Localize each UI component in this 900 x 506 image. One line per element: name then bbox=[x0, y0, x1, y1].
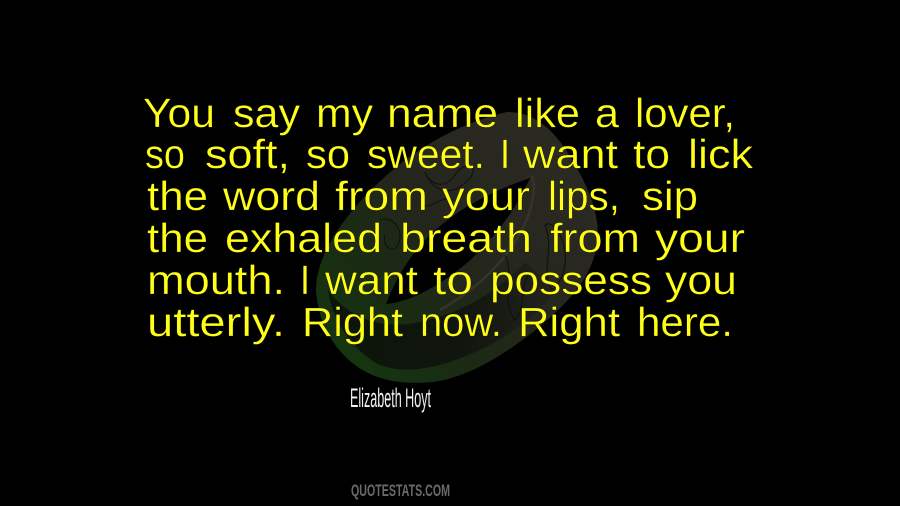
quote line 5: want bbox=[324, 257, 419, 303]
quote line 3: the bbox=[147, 173, 208, 219]
quote line 4: your bbox=[655, 215, 745, 261]
quote line 1: name bbox=[387, 90, 498, 136]
quote line 5: you bbox=[665, 257, 737, 303]
ring outer body bbox=[316, 112, 598, 383]
quote line 2: soft, bbox=[205, 131, 290, 177]
text: Elizabeth Hoyt bbox=[350, 383, 431, 413]
quote line 5 bbox=[147, 257, 737, 303]
quote line 3: sip bbox=[642, 173, 698, 219]
quote line 2: to bbox=[633, 131, 670, 177]
quote line 4: exhaled bbox=[225, 215, 382, 261]
quote line 3 bbox=[147, 173, 698, 219]
quote line 2: so bbox=[306, 131, 350, 177]
quote line 6: now. bbox=[420, 299, 502, 345]
quote line 4: breath bbox=[400, 215, 532, 261]
quote line 1: a bbox=[595, 90, 619, 136]
quote line 4 bbox=[147, 215, 745, 261]
quote line 5: mouth. bbox=[147, 257, 285, 303]
quote line 1: say bbox=[233, 90, 301, 136]
quote line 1: like bbox=[515, 90, 580, 136]
quote line 5: to bbox=[433, 257, 473, 303]
quote line 2: so bbox=[145, 131, 185, 177]
quote line 2: I bbox=[500, 131, 510, 177]
quote line 6: Right bbox=[302, 299, 404, 345]
quote line 1 bbox=[143, 90, 735, 136]
quote text bbox=[143, 90, 754, 345]
quote line 1: my bbox=[316, 90, 374, 136]
quote line 3: from bbox=[335, 173, 428, 219]
quote line 3: word bbox=[222, 173, 320, 219]
ring opening bbox=[386, 178, 530, 304]
quote line 6: here. bbox=[637, 299, 733, 345]
ring lower inner band bbox=[328, 262, 556, 370]
quote line 3: your bbox=[442, 173, 530, 219]
quote line 2: want bbox=[522, 131, 619, 177]
quote line 4: from bbox=[550, 215, 640, 261]
quote line 1: lover, bbox=[635, 90, 735, 136]
quote line 4: the bbox=[147, 215, 208, 261]
quote line 2: sweet. bbox=[367, 131, 485, 177]
quote line 6 bbox=[147, 299, 733, 345]
quote line 3: lips, bbox=[548, 173, 620, 219]
background ring image bbox=[316, 112, 598, 383]
quote line 2 bbox=[145, 131, 754, 177]
ring engraved pattern bbox=[380, 166, 565, 320]
quote line 5: I bbox=[300, 257, 310, 303]
site credit: QUOTESTATS.COM bbox=[351, 481, 450, 500]
quote line 6: Right bbox=[518, 299, 621, 345]
quote line 1: You bbox=[143, 90, 215, 136]
quote line 6: utterly. bbox=[147, 299, 285, 345]
quote line 2: lick bbox=[688, 131, 754, 177]
quote line 5: possess bbox=[490, 257, 652, 303]
ring lit inner rim bbox=[440, 176, 534, 310]
